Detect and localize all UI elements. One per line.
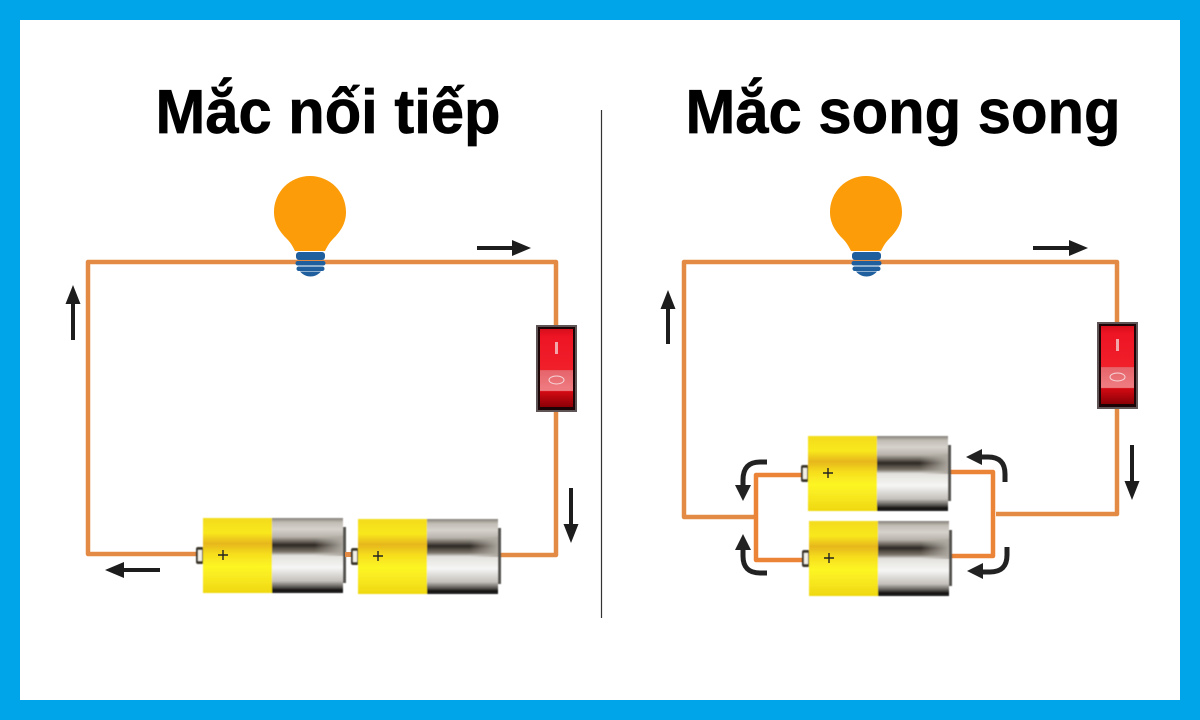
arrow: right [1033, 240, 1088, 256]
icon: bulb [274, 176, 346, 276]
battery 1 [196, 518, 346, 593]
wire: between batteries [345, 552, 357, 557]
curved arrow: top right [966, 449, 1005, 482]
wire: left branch [756, 475, 804, 560]
curved arrow: bottom right [967, 547, 1007, 579]
arrow: left [105, 562, 160, 578]
curved arrow: bottom left [735, 534, 767, 573]
wire: series loop [88, 262, 556, 555]
wire: right branch [948, 472, 993, 556]
arrow: up [660, 290, 676, 344]
title: series: Mắc nối tiếp [156, 78, 500, 147]
panel: series circuit [66, 176, 578, 594]
wire: main loop [684, 262, 1117, 517]
icon: switch [1097, 322, 1138, 409]
arrow: up [66, 285, 80, 340]
battery bottom [802, 521, 952, 596]
curved arrow: top left [735, 462, 767, 501]
panel: parallel circuit [660, 176, 1140, 596]
battery top [801, 436, 951, 511]
arrow: down [1124, 445, 1140, 500]
battery 2 [351, 519, 501, 594]
arrow: down [564, 488, 578, 543]
arrow: right [477, 240, 531, 256]
icon: switch [536, 325, 577, 412]
icon: bulb [830, 176, 902, 276]
title: parallel: Mắc song song [686, 78, 1120, 147]
